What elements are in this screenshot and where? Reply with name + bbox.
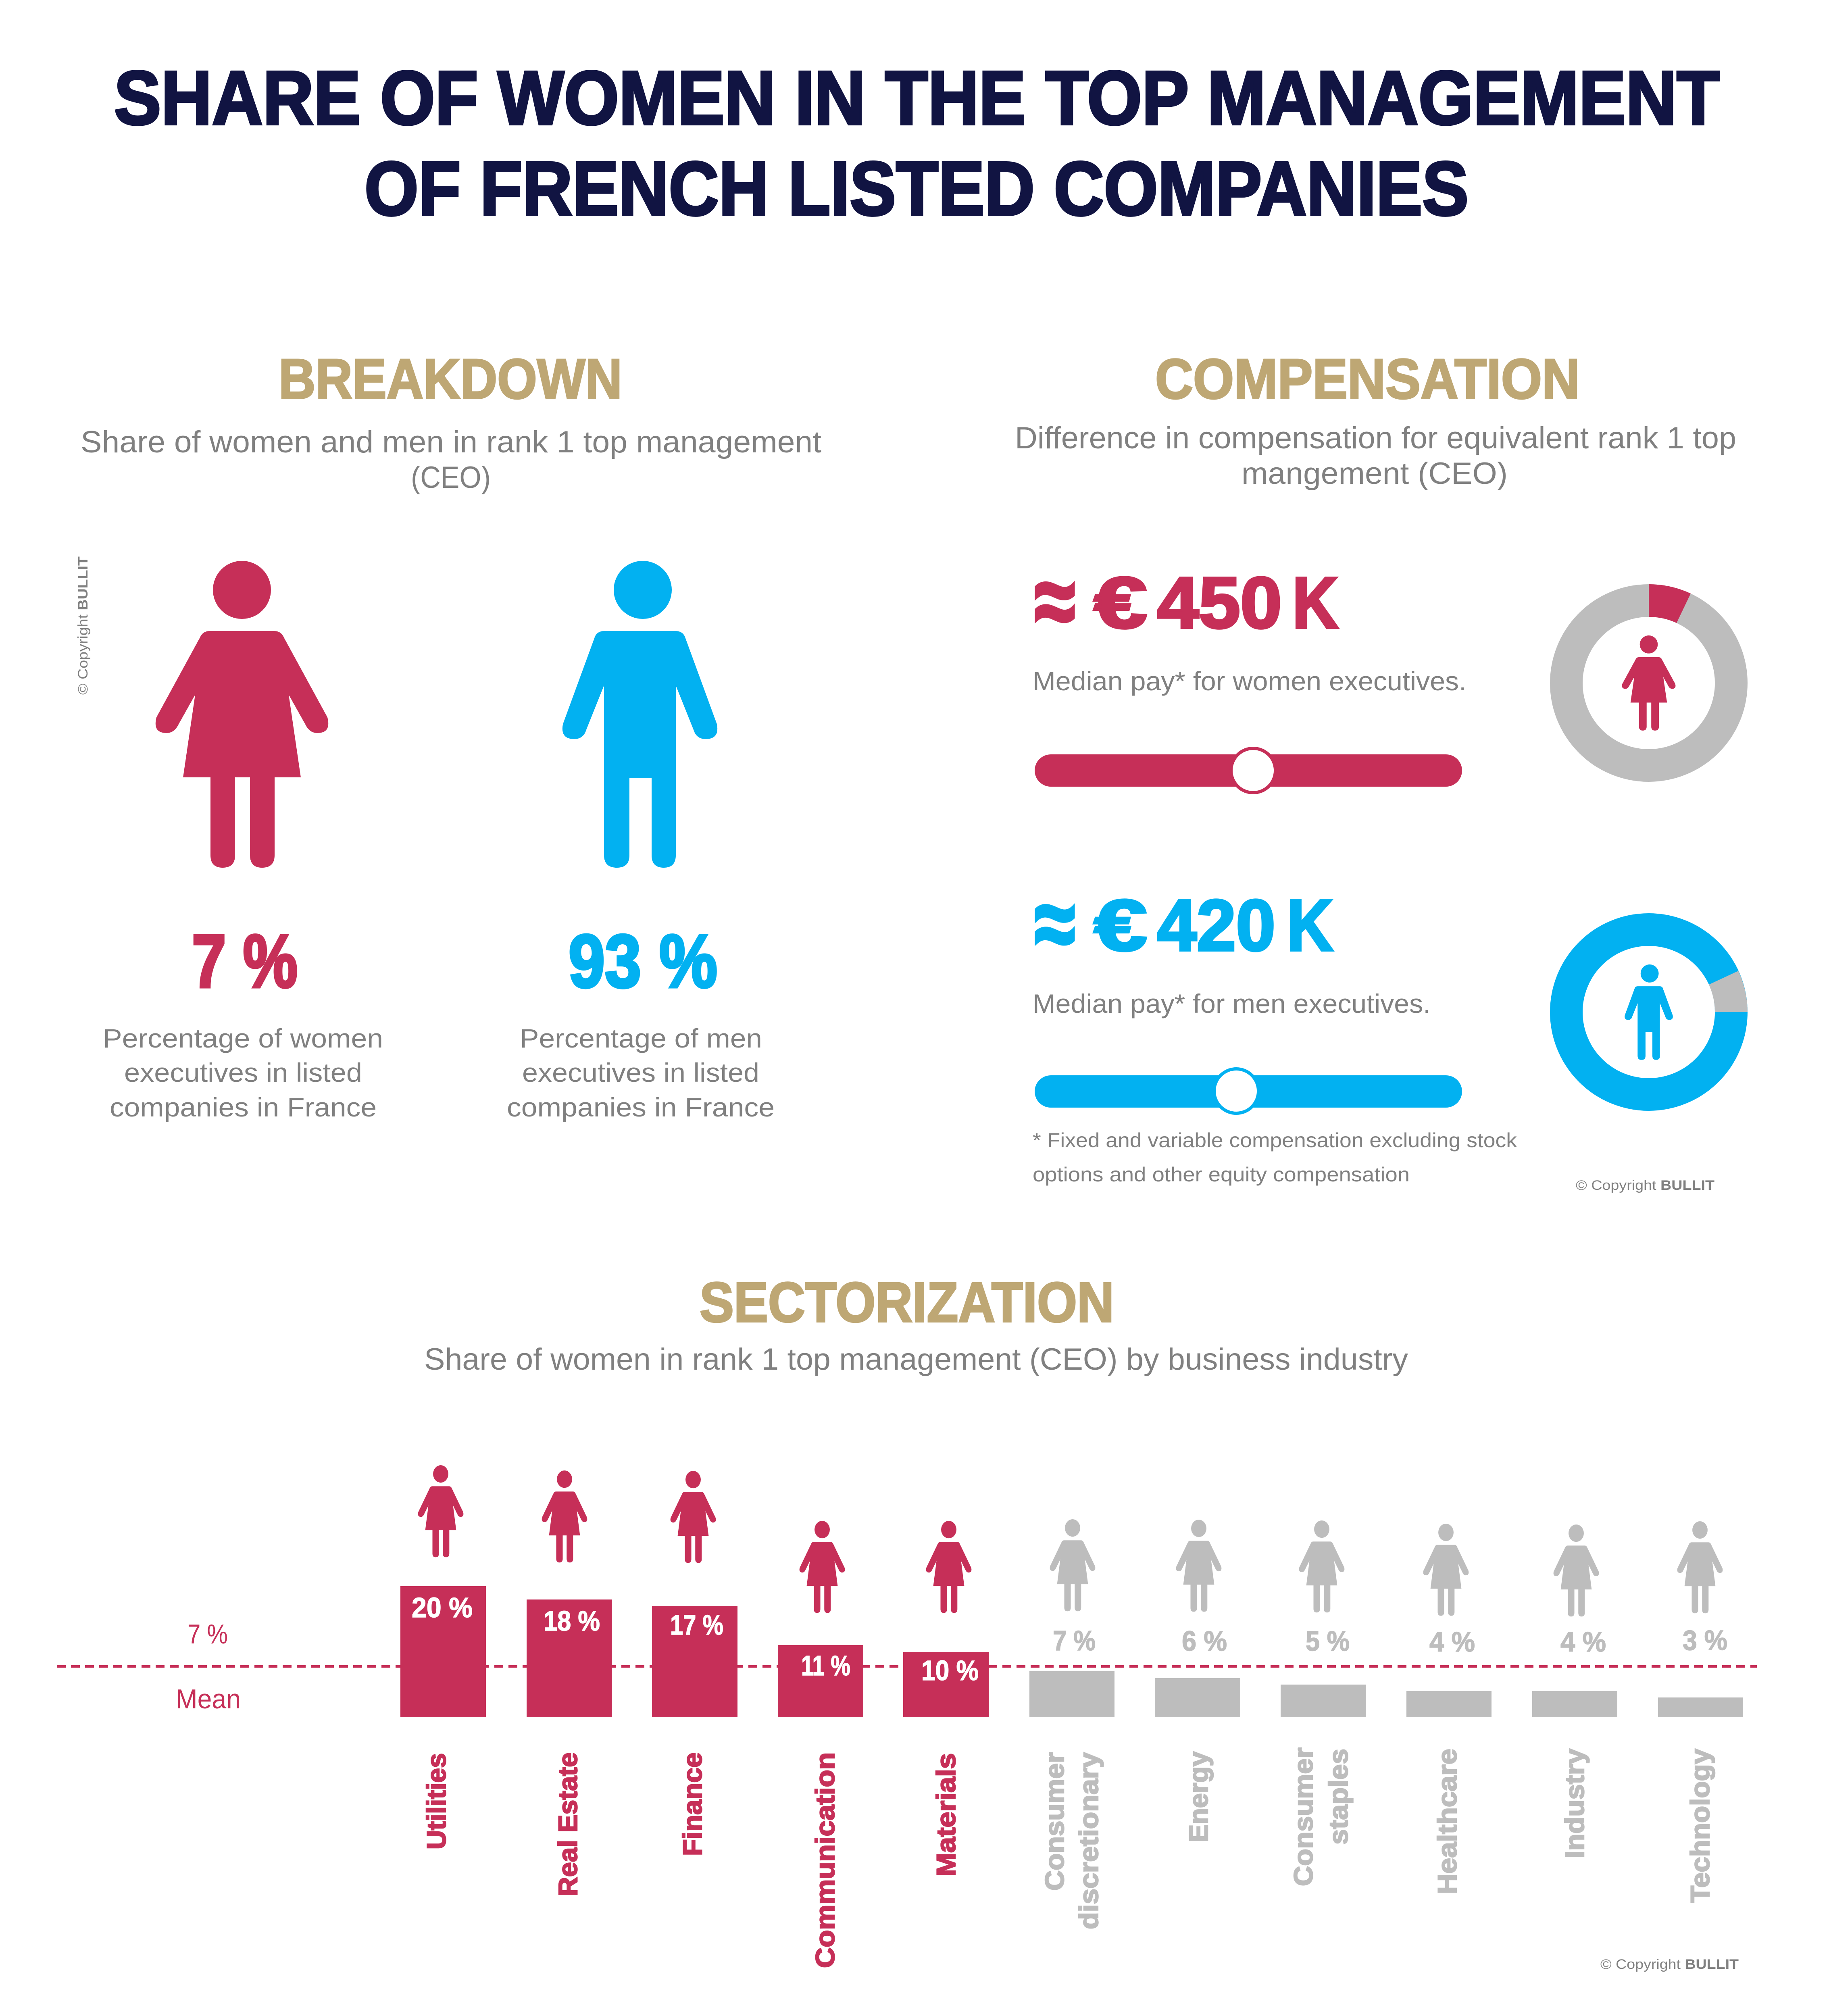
heading: compensation: COMPENSATION xyxy=(1155,347,1580,410)
men pay slider xyxy=(1035,1069,1462,1113)
category labels xyxy=(421,1747,1715,1968)
icon: woman industry xyxy=(1554,1524,1599,1616)
icon: woman utilities xyxy=(418,1465,463,1557)
title: SHARE OF WOMEN IN THE TOP MANAGEMENT xyxy=(114,56,1720,141)
women pay description: Median pay* for women executives. xyxy=(1033,666,1467,696)
bar value labels: 17 % xyxy=(670,1609,723,1641)
women pay figure: K xyxy=(1292,562,1338,644)
heading: sectorization: SECTORIZATION xyxy=(700,1270,1114,1334)
icon: man in donut xyxy=(1625,964,1673,1060)
icon: woman consumer discretionary xyxy=(1050,1519,1095,1611)
mean label: Mean xyxy=(176,1684,241,1714)
bar: consumer discretionary xyxy=(1029,1671,1114,1717)
bar: energy xyxy=(1155,1678,1240,1717)
men pay figure: K xyxy=(1287,885,1333,966)
panel: breakdown xyxy=(75,347,821,1122)
men description: Percentage of men xyxy=(520,1023,762,1053)
compensation subtitle: mangement (CEO) xyxy=(1242,456,1508,491)
women description: Percentage of women xyxy=(103,1023,383,1053)
bar value labels: 4 % xyxy=(1560,1626,1606,1658)
bar value labels: 18 % xyxy=(544,1605,600,1637)
bar: finance xyxy=(652,1606,737,1717)
category labels: staples xyxy=(1323,1749,1353,1845)
icon: woman materials xyxy=(926,1521,971,1613)
bar value labels: 11 % xyxy=(801,1650,850,1681)
copyright sectorization: © Copyright BULLIT xyxy=(1600,1957,1739,1972)
bar value labels: 5 % xyxy=(1306,1625,1350,1657)
copyright compensation: © Copyright BULLIT xyxy=(1576,1178,1714,1193)
women donut chart xyxy=(1566,584,1731,765)
category labels: Real Estate xyxy=(553,1752,583,1896)
category labels: Communication xyxy=(810,1752,840,1968)
men description: executives in listed xyxy=(522,1058,759,1087)
panel: compensation xyxy=(1015,347,1748,1193)
men description xyxy=(507,1023,775,1122)
icon: woman consumer staples xyxy=(1299,1520,1344,1612)
bar: utilities xyxy=(400,1586,486,1717)
men pay description: Median pay* for men executives. xyxy=(1033,989,1431,1018)
bar: industry xyxy=(1532,1691,1617,1717)
women pay figure: ≈ xyxy=(1035,547,1075,655)
women description xyxy=(103,1023,383,1122)
icon: man large xyxy=(562,561,717,868)
panel: sectorization xyxy=(57,1270,1757,1972)
icon: woman technology xyxy=(1677,1521,1723,1613)
category labels: Materials xyxy=(931,1753,961,1876)
bar chart xyxy=(400,1586,1743,1717)
men percentage: 93 % xyxy=(569,920,717,1003)
women pay figure xyxy=(1035,547,1338,655)
bar value labels: 3 % xyxy=(1683,1624,1727,1656)
category labels: Healthcare xyxy=(1432,1749,1462,1894)
mean value label: 7 % xyxy=(187,1619,228,1649)
men pay figure: 420 xyxy=(1157,885,1275,966)
footnote: options and other equity compensation xyxy=(1033,1163,1410,1186)
category labels: Utilities xyxy=(421,1753,451,1849)
breakdown subtitle: Share of women and men in rank 1 top management xyxy=(81,425,821,459)
title xyxy=(114,56,1720,231)
women description: executives in listed xyxy=(124,1058,362,1087)
icon: woman healthcare xyxy=(1423,1524,1469,1616)
men donut chart xyxy=(1566,930,1748,1094)
bar: communication xyxy=(778,1645,863,1717)
men pay figure xyxy=(1035,869,1333,977)
icon: woman finance xyxy=(671,1471,716,1563)
women percentage: 7 % xyxy=(192,920,298,1003)
women description: companies in France xyxy=(110,1092,377,1122)
compensation subtitle xyxy=(1015,421,1736,491)
bar value labels: 20 % xyxy=(412,1592,473,1623)
breakdown subtitle xyxy=(81,425,821,495)
bar: technology xyxy=(1658,1697,1743,1717)
bar value labels xyxy=(412,1592,1727,1686)
mean dashed line xyxy=(57,1665,1757,1668)
bar value labels: 7 % xyxy=(1053,1625,1096,1656)
heading: breakdown: BREAKDOWN xyxy=(279,347,622,410)
women pay figure: 450 xyxy=(1157,562,1282,644)
sectorization subtitle: Share of women in rank 1 top management (CEO) by business industry xyxy=(424,1342,1408,1377)
bar value labels: 10 % xyxy=(921,1655,979,1686)
footnote xyxy=(1033,1129,1517,1186)
women pay slider xyxy=(1035,748,1462,793)
bar value labels: 6 % xyxy=(1182,1625,1227,1657)
title: OF FRENCH LISTED COMPANIES xyxy=(365,146,1469,231)
icon: woman energy xyxy=(1176,1520,1221,1612)
category labels: discretionary xyxy=(1074,1752,1104,1929)
bar: materials xyxy=(903,1652,989,1717)
category labels: Industry xyxy=(1560,1749,1589,1858)
bar: healthcare xyxy=(1406,1691,1492,1717)
category labels: Finance xyxy=(677,1752,707,1856)
compensation subtitle: Difference in compensation for equivalent rank 1 top xyxy=(1015,421,1736,455)
icon: woman in donut xyxy=(1622,635,1675,731)
sector woman icons xyxy=(418,1465,1723,1616)
footnote: * Fixed and variable compensation excluding stock xyxy=(1033,1129,1517,1152)
icon: woman real estate xyxy=(542,1470,587,1562)
category labels: Energy xyxy=(1183,1752,1213,1842)
bar value labels: 4 % xyxy=(1429,1626,1475,1658)
category labels: Consumer xyxy=(1288,1747,1318,1886)
category labels: Consumer xyxy=(1039,1752,1069,1891)
vertical copyright: © Copyright BULLIT xyxy=(75,556,91,695)
category labels: Technology xyxy=(1685,1749,1715,1903)
bar: real estate xyxy=(527,1599,612,1717)
men pay figure: ≈ xyxy=(1035,869,1075,977)
breakdown subtitle: (CEO) xyxy=(411,460,491,495)
men pay figure: € xyxy=(1094,885,1147,966)
women pay figure: € xyxy=(1094,562,1147,644)
bar: consumer staples xyxy=(1281,1685,1366,1717)
icon: woman large xyxy=(156,561,328,868)
men description: companies in France xyxy=(507,1092,775,1122)
icon: woman communication xyxy=(800,1521,845,1613)
